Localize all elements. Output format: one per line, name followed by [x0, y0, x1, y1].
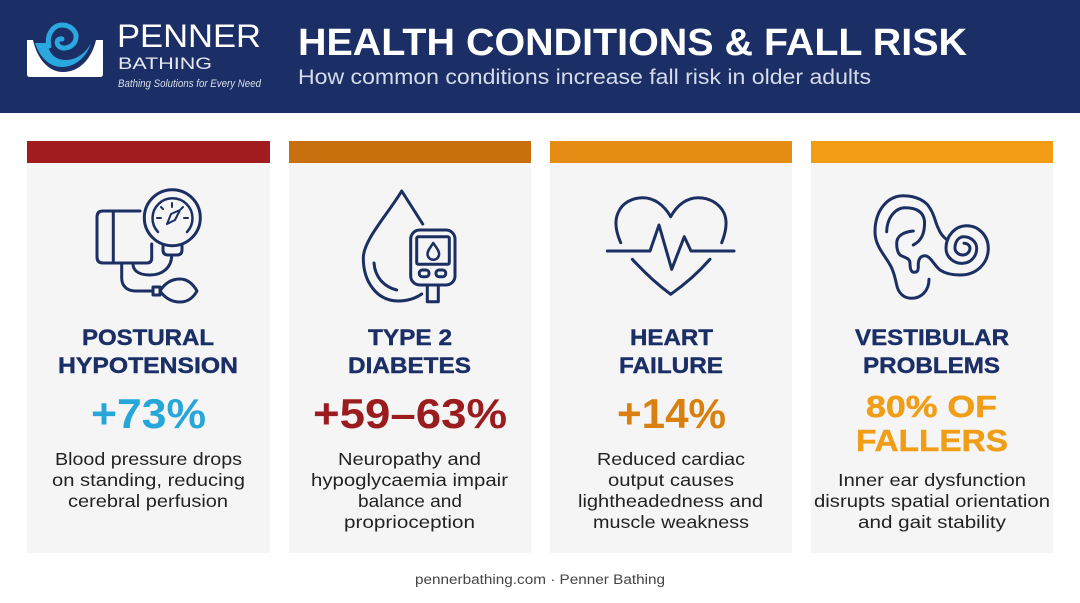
icon: ear and cochlea — [875, 196, 988, 298]
icon: blood drop and glucose meter — [363, 191, 455, 302]
description: output causes — [608, 470, 734, 490]
logo tagline: Bathing Solutions for Every Need — [118, 78, 262, 90]
heading — [58, 325, 238, 378]
description: and gait stability — [858, 512, 1006, 532]
description: Blood pressure drops — [55, 449, 242, 469]
heading: HEART — [630, 325, 714, 350]
panel: vestibular problems — [811, 141, 1053, 553]
logo wordmark: PENNER — [117, 18, 261, 54]
heading: TYPE 2 — [368, 325, 452, 350]
heading: POSTURAL — [82, 325, 214, 350]
panel: type 2 diabetes — [289, 141, 531, 553]
stat: +73% — [91, 390, 206, 437]
stat: FALLERS — [856, 423, 1008, 458]
heading — [348, 325, 471, 378]
stat: +14% — [617, 390, 726, 437]
description: disrupts spatial orientation — [814, 491, 1050, 511]
stat — [856, 389, 1008, 458]
heading: DIABETES — [348, 353, 471, 378]
description: on standing, reducing — [52, 470, 245, 490]
description: Neuropathy and — [338, 449, 481, 469]
description: muscle weakness — [593, 512, 749, 532]
description: Reduced cardiac — [597, 449, 745, 469]
icon: blood pressure monitor — [97, 190, 200, 302]
stat: +59–63% — [313, 390, 507, 437]
subtitle: How common conditions increase fall risk in older adults — [298, 66, 871, 89]
description: hypoglycaemia impair — [311, 470, 508, 490]
heading — [855, 325, 1009, 378]
panel: postural hypotension — [27, 141, 270, 553]
description: balance and — [358, 491, 462, 511]
heading: PROBLEMS — [863, 353, 1000, 378]
description: cerebral perfusion — [68, 491, 228, 511]
description — [814, 470, 1050, 532]
logo: bathtub and wave — [27, 25, 103, 77]
stat: 80% OF — [866, 389, 997, 424]
heading: VESTIBULAR — [855, 325, 1009, 350]
footer: pennerbathing.com · Penner Bathing — [415, 572, 665, 587]
description: lightheadedness and — [578, 491, 763, 511]
title: HEALTH CONDITIONS & FALL RISK — [298, 22, 968, 64]
description — [52, 449, 245, 511]
logo — [27, 18, 262, 90]
heading: HYPOTENSION — [58, 353, 238, 378]
logo subword: BATHING — [118, 54, 212, 73]
heading: FAILURE — [619, 353, 723, 378]
panel: heart failure — [550, 141, 792, 553]
description: proprioception — [344, 512, 475, 532]
description: Inner ear dysfunction — [838, 470, 1026, 490]
header banner — [0, 0, 1080, 113]
heading — [619, 325, 723, 378]
description — [578, 449, 763, 532]
icon: heart with pulse — [607, 198, 734, 294]
description — [311, 449, 508, 532]
